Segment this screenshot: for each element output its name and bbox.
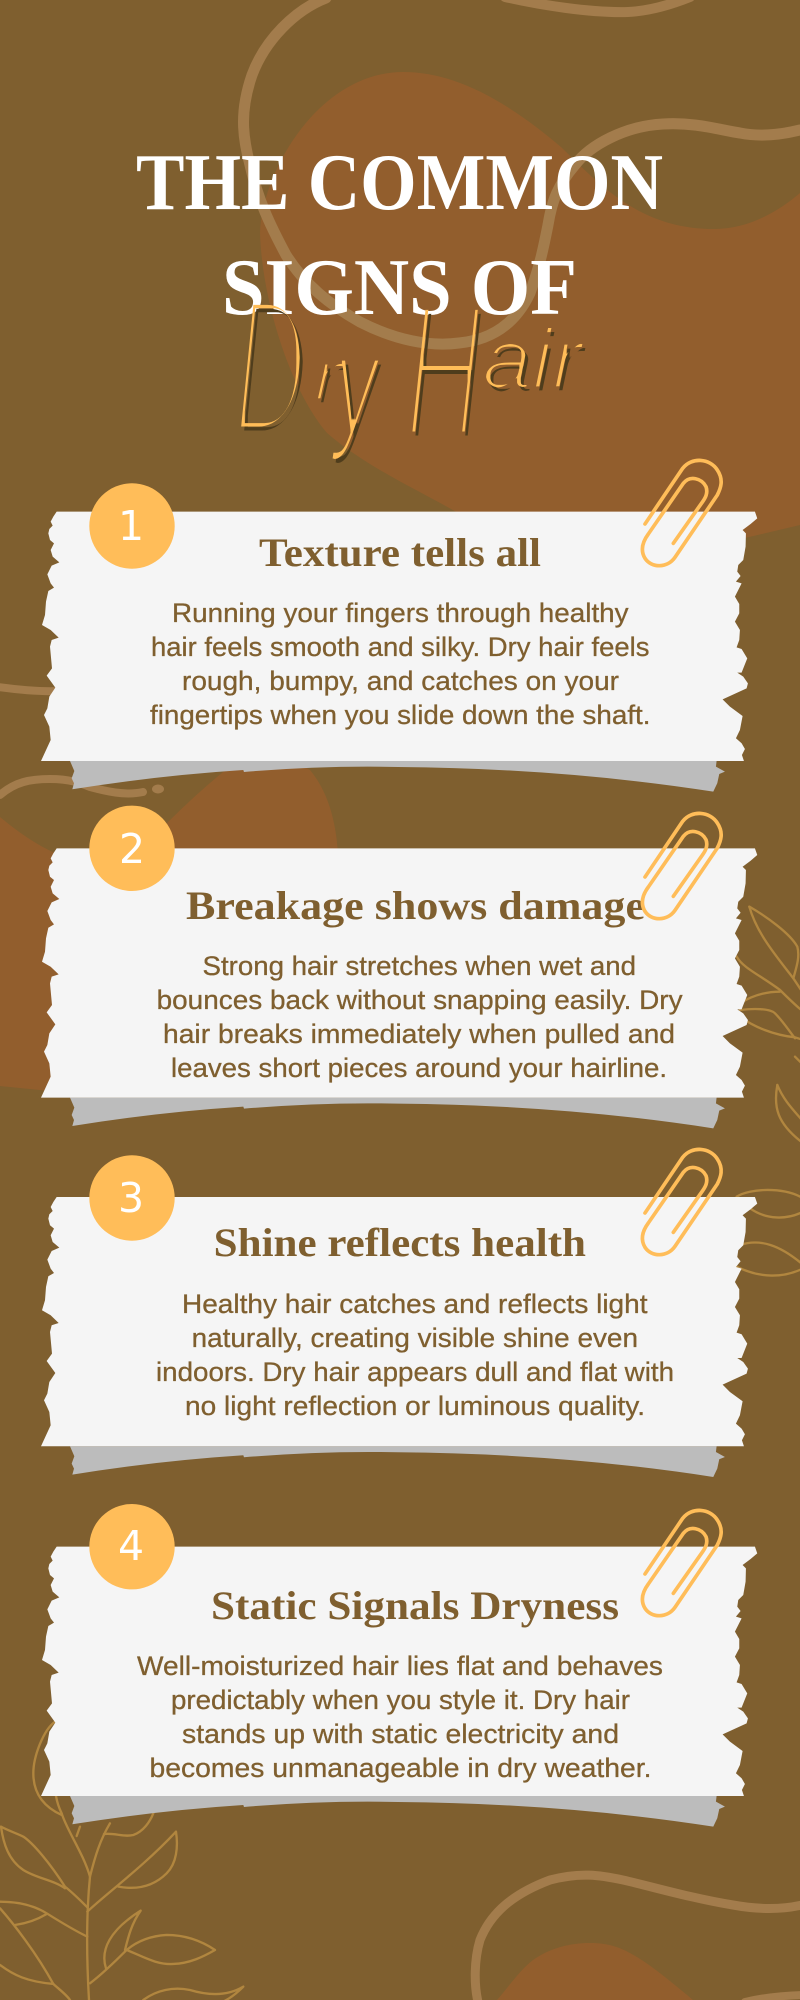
script title: dry hair: y: [333, 313, 384, 466]
swirl: middle left lines: [0, 687, 164, 795]
number badge 3: [89, 1155, 175, 1241]
body text 1: Running your fingers through healthy: [172, 598, 629, 628]
torn tape 4: [70, 1796, 725, 1827]
body text 2: bounces back without snapping easily. Dry: [157, 985, 683, 1015]
paperclip 3: [642, 1149, 721, 1255]
title: the common signs of: THE COMMON: [136, 139, 663, 227]
body text 4: Well-moisturized hair lies flat and behaves: [137, 1651, 663, 1681]
script title: dry hair: D: [237, 261, 309, 477]
title: the common signs of: SIGNS OF: [222, 244, 577, 332]
panel: card 3 shine: [41, 1149, 757, 1477]
number badge 2: 2: [119, 825, 145, 873]
body text 3: Healthy hair catches and reflects light: [182, 1289, 648, 1319]
body text 3: no light reflection or luminous quality.: [185, 1391, 645, 1421]
script title: dry hair: y: [330, 309, 381, 462]
leaves: right side plant: [737, 907, 800, 1276]
paper 2: [41, 848, 757, 1098]
body text 4: [137, 1651, 663, 1783]
script title: dry hair: D: [234, 257, 306, 473]
paperclip 4: [642, 1510, 721, 1616]
number badge 2: [89, 806, 175, 891]
torn tape 1: [70, 761, 725, 792]
script title: dry hair: r: [317, 341, 347, 419]
script title: dry hair: air: [485, 317, 588, 410]
torn tape 3: [70, 1446, 725, 1477]
body text 4: becomes unmanageable in dry weather.: [150, 1753, 652, 1783]
blob: left orange shape: [0, 758, 338, 1096]
body text 2: leaves short pieces around your hairline.: [171, 1053, 667, 1083]
body text 2: Strong hair stretches when wet and: [202, 951, 636, 981]
paper 4: [41, 1547, 757, 1796]
number badge 4: 4: [118, 1522, 144, 1570]
blob: large top orange shape: [260, 72, 800, 538]
panel: card 2 breakage: [41, 806, 757, 1128]
swirl: bottom right lines: [475, 1875, 800, 2000]
script title: dry hair: r: [314, 337, 344, 415]
number badge 1: [89, 483, 175, 569]
number badge 3: 3: [118, 1174, 144, 1222]
body text 3: naturally, creating visible shine even: [192, 1323, 638, 1353]
paper 1: [41, 512, 757, 761]
script title: dry hair: air: [482, 313, 585, 406]
body text 1: hair feels smooth and silky. Dry hair feels: [151, 632, 650, 662]
title: the common signs of: [136, 139, 663, 332]
torn tape 2: [70, 1098, 725, 1128]
heading 4: Static Signals Dryness: [211, 1583, 619, 1628]
body text 2: [157, 951, 683, 1083]
body text 1: fingertips when you slide down the shaft.: [150, 700, 650, 730]
body text 3: [156, 1289, 674, 1421]
panel: card 4 static: [41, 1504, 757, 1827]
number badge 4: [89, 1504, 175, 1589]
body text 3: indoors. Dry hair appears dull and flat with: [156, 1357, 674, 1387]
body text 1: rough, bumpy, and catches on your: [182, 666, 619, 696]
body text 1: [150, 598, 650, 730]
script title: dry hair: H: [405, 264, 482, 479]
heading 2: Breakage shows damage: [186, 883, 645, 928]
body text 2: hair breaks immediately when pulled and: [163, 1019, 675, 1049]
body text 4: predictably when you style it. Dry hair: [171, 1685, 630, 1715]
blob: bottom orange shape: [497, 1943, 693, 2000]
body text 4: stands up with static electricity and: [182, 1719, 619, 1749]
script title: dry hair: H: [408, 268, 485, 483]
panel: card 1 texture: [41, 460, 757, 792]
leaves: bottom left plant: [0, 1722, 243, 2000]
heading 1: Texture tells all: [259, 530, 541, 575]
paperclip 2: [642, 813, 721, 919]
swirl: top lines: [244, 0, 800, 344]
number badge 1: 1: [118, 502, 144, 550]
paper 3: [41, 1197, 757, 1446]
heading 3: Shine reflects health: [214, 1220, 586, 1265]
script title: dry hair: [234, 257, 588, 483]
paperclip 1: [642, 460, 721, 566]
